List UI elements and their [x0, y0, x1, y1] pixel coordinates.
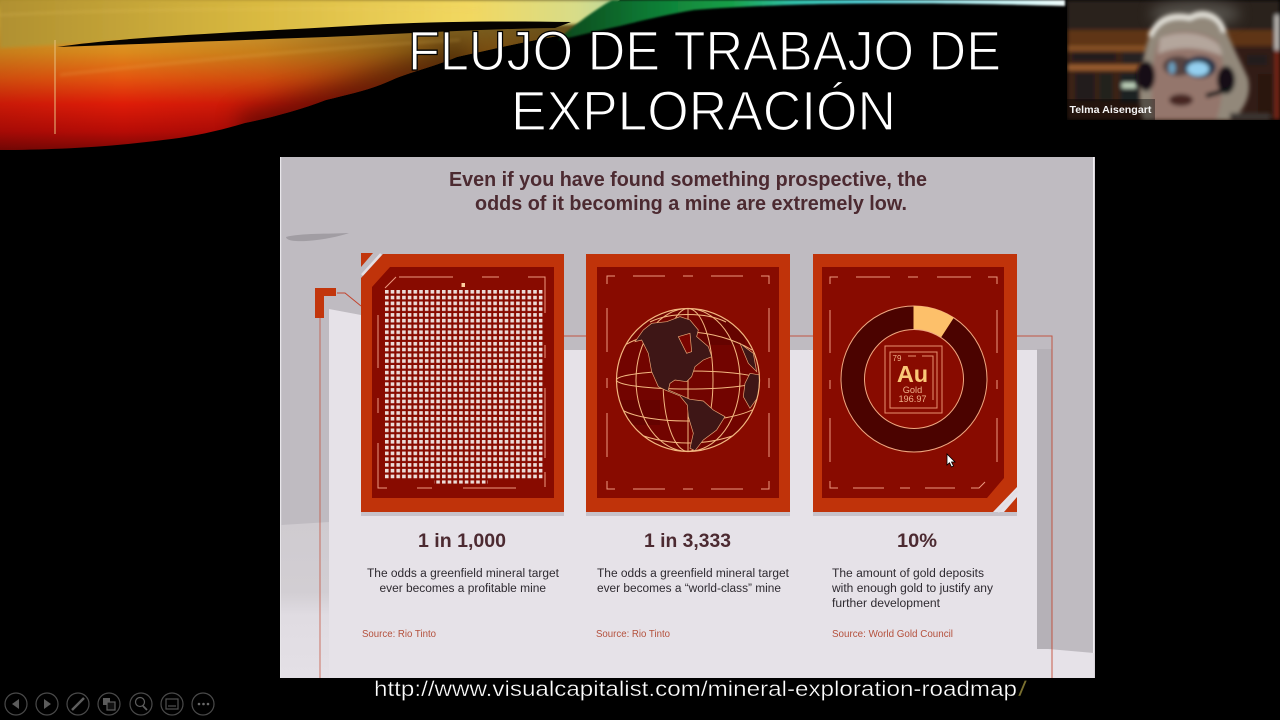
connector lines: [320, 293, 1052, 678]
stat column: 1 in 3,333: 1 in 3,333: [644, 531, 731, 552]
panel background: [280, 157, 1095, 678]
icon: next: [36, 693, 58, 715]
stat column: 10%: 10%: [897, 531, 937, 552]
slideshow navigation controls: [5, 693, 214, 715]
webcam: speaker video: [1067, 0, 1280, 120]
icon: corner flag: [315, 288, 336, 318]
stat column: 10%: further development: [832, 598, 941, 610]
icon: mouse cursor: [947, 454, 955, 467]
stat column: 1 in 1,000: ever becomes a profitable mine: [380, 583, 546, 595]
stat column: 1 in 1,000: 1 in 1,000: [418, 531, 506, 552]
heading: [449, 169, 927, 215]
webcam name label: [1067, 99, 1155, 120]
card: 1 in 3,333 globe: [586, 254, 790, 516]
icon: zoom: [130, 693, 152, 715]
icon: subtitles: [161, 693, 183, 715]
gold element tile: 79: [892, 354, 902, 363]
vertical accent line: [54, 40, 56, 134]
card: 10% gold donut: [813, 254, 1017, 516]
stat column: 1 in 3,333: [596, 531, 790, 640]
heading: odds of it becoming a mine are extremely low.: [475, 193, 907, 215]
stat column: 1 in 3,333: Source: Rio Tinto: [596, 628, 670, 640]
gold element tile: Gold: [903, 385, 922, 395]
source URL: http://www.visualcapitalist.com/mineral-exploration-roadmap: [374, 678, 1017, 701]
title: FLUJO DE TRABAJO DE: [408, 19, 1001, 82]
stat column: 10%: The amount of gold deposits: [832, 568, 984, 580]
stat column: 1 in 1,000: Source: Rio Tinto: [362, 628, 436, 640]
icon: pen: [67, 693, 89, 715]
decorative colour swoosh: [0, 0, 1065, 155]
webcam name label: Telma Aisengart: [1070, 104, 1152, 116]
gold element tile: 196.97: [898, 394, 927, 404]
heading: Even if you have found something prospective, the: [449, 169, 927, 191]
card: 1 in 1,000 dot grid: [361, 253, 564, 516]
icon: more: [192, 693, 214, 715]
donut chart: [841, 306, 987, 452]
title: EXPLORACIÓN: [511, 79, 896, 142]
dot matrix: [385, 283, 543, 484]
source URL: /: [1018, 678, 1027, 701]
stat column: 10%: Source: World Gold Council: [832, 628, 953, 640]
gold element tile: Au: [897, 361, 928, 387]
title: [408, 19, 1001, 142]
stat column: 1 in 1,000: [362, 531, 560, 640]
light diagonal stripes on card corners: [362, 254, 1017, 512]
stat column: 10%: with enough gold to justify any: [831, 583, 993, 595]
icon: slides: [98, 693, 120, 715]
panel: infographic image: [280, 157, 1095, 678]
icon: previous: [5, 693, 27, 715]
gold element tile: [885, 346, 942, 413]
globe illustration: [616, 308, 760, 452]
stat column: 10%: [831, 531, 993, 640]
stat column: 1 in 3,333: ever becomes a “world-class” mine: [597, 583, 781, 595]
stat column: 1 in 3,333: The odds a greenfield mineral target: [597, 568, 790, 580]
stat column: 1 in 1,000: The odds a greenfield mineral target: [367, 568, 560, 580]
